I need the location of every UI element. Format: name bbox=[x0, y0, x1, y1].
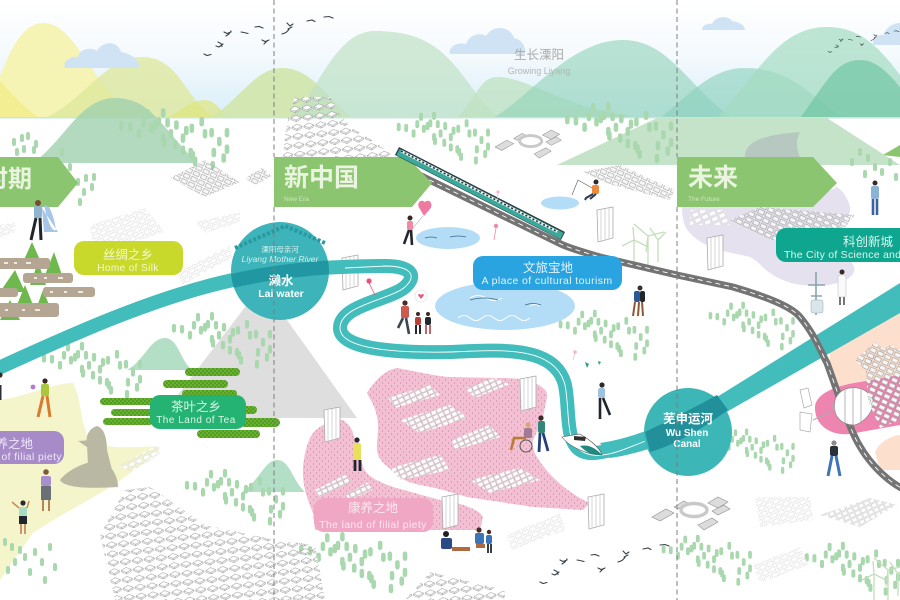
chevron: New Era bbox=[274, 157, 432, 207]
translucent foreground mountains bbox=[33, 98, 900, 165]
road bbox=[405, 168, 900, 490]
people: wheelchair pair bbox=[511, 415, 548, 452]
label: The Land of Tea: 茶叶之乡 bbox=[171, 399, 221, 414]
bird flocks bbox=[204, 16, 899, 584]
circle: Wu Shen Canal bbox=[644, 388, 732, 476]
pink wellness zone bbox=[303, 368, 590, 530]
white blocks in pink zone bbox=[315, 378, 540, 500]
hoop-shaped buildings bbox=[495, 130, 730, 530]
wind turbines bbox=[622, 224, 900, 600]
label: place of cultural tourism: 文旅宝地 bbox=[523, 260, 573, 275]
chevron: New Era: New Era bbox=[284, 196, 309, 203]
lilac future zone bbox=[682, 132, 854, 286]
label: Home of Silk: 丝绸之乡 bbox=[103, 248, 153, 262]
label: The Land of Tea bbox=[150, 395, 246, 429]
chevron: The Future bbox=[677, 157, 837, 207]
label: place of cultural tourism: A place of cultural tourism bbox=[481, 275, 613, 287]
person: scientist with phone bbox=[871, 180, 879, 215]
robot tower bbox=[808, 272, 825, 315]
circle: Lai water: Liyang Mother River bbox=[242, 254, 320, 264]
tea plantation rows bbox=[100, 368, 280, 438]
circle: Wu Shen Canal: Wu Shen bbox=[666, 428, 708, 439]
lotus innovation building bbox=[800, 342, 900, 432]
person: woman with dress bbox=[31, 200, 58, 240]
chevron: The Future: The Future bbox=[688, 196, 720, 203]
label: place of cultural tourism bbox=[473, 256, 622, 290]
label: land of filial piety pink bbox=[314, 498, 433, 532]
circle: Lai water bbox=[231, 222, 329, 320]
label: City of Science: 科创新城 bbox=[843, 234, 893, 249]
person: green top with flowers bbox=[31, 378, 50, 417]
dashed period dividers bbox=[274, 0, 677, 600]
people: family bbox=[398, 290, 431, 334]
people: picnic group bbox=[441, 527, 492, 553]
label: Home of Silk: Home of Silk bbox=[97, 263, 159, 274]
person: woman in grey skirt bbox=[41, 469, 51, 511]
peach and pink innovation zones bbox=[815, 310, 900, 470]
person: balloon woman bbox=[404, 201, 431, 245]
circle: Wu Shen Canal: 芜申运河 bbox=[663, 411, 713, 426]
circle: Wu Shen Canal: Canal bbox=[673, 439, 701, 450]
statue bbox=[60, 426, 118, 488]
people: couple bbox=[633, 286, 645, 316]
conifer forest with taupe plaques bbox=[0, 242, 95, 320]
chevron: The Future: 未来 bbox=[688, 164, 738, 192]
label: Home of Silk bbox=[74, 241, 183, 275]
label: filial piety purple bbox=[0, 431, 64, 464]
pink pins bbox=[366, 190, 601, 368]
person: child bbox=[12, 500, 29, 534]
tower blocks bbox=[324, 207, 723, 529]
heading: Growing Liyang: Growing Liyang bbox=[508, 66, 570, 76]
circle: Lai water: Lai water bbox=[258, 288, 304, 300]
chevron: dynasty period bbox=[0, 157, 78, 207]
circle: Lai water: 濑水 bbox=[268, 273, 294, 288]
circle: Lai water: 溧阳母亲河 bbox=[261, 244, 299, 254]
boat bbox=[562, 434, 602, 455]
heading: Growing Liyang bbox=[508, 48, 570, 76]
label: The Land of Tea: The Land of Tea bbox=[156, 415, 236, 426]
clouds bbox=[64, 17, 900, 68]
chevron: New Era: 新中国 bbox=[284, 164, 359, 192]
label: land of filial piety pink: 康养之地 bbox=[348, 500, 398, 515]
label: City of Science bbox=[776, 228, 900, 262]
person: jeans walker bbox=[828, 440, 840, 476]
river bbox=[0, 266, 900, 458]
label: land of filial piety pink: The land of filial piety bbox=[319, 520, 427, 531]
person: fisher bbox=[572, 180, 599, 200]
heading: Growing Liyang: 生长溧阳 bbox=[514, 48, 564, 62]
green edge shape on right bbox=[883, 145, 900, 157]
grey and small green mountains bbox=[127, 285, 357, 492]
sky bbox=[0, 0, 900, 118]
person: left edge bbox=[0, 372, 3, 400]
lakes bbox=[416, 196, 579, 330]
person: white coat bbox=[838, 270, 846, 305]
yellow filial piety zone bbox=[0, 383, 160, 580]
distant mountains bbox=[0, 23, 900, 118]
person: walking woman bbox=[598, 382, 610, 419]
high-speed train bbox=[397, 151, 563, 236]
person: yellow coat bbox=[353, 437, 361, 471]
